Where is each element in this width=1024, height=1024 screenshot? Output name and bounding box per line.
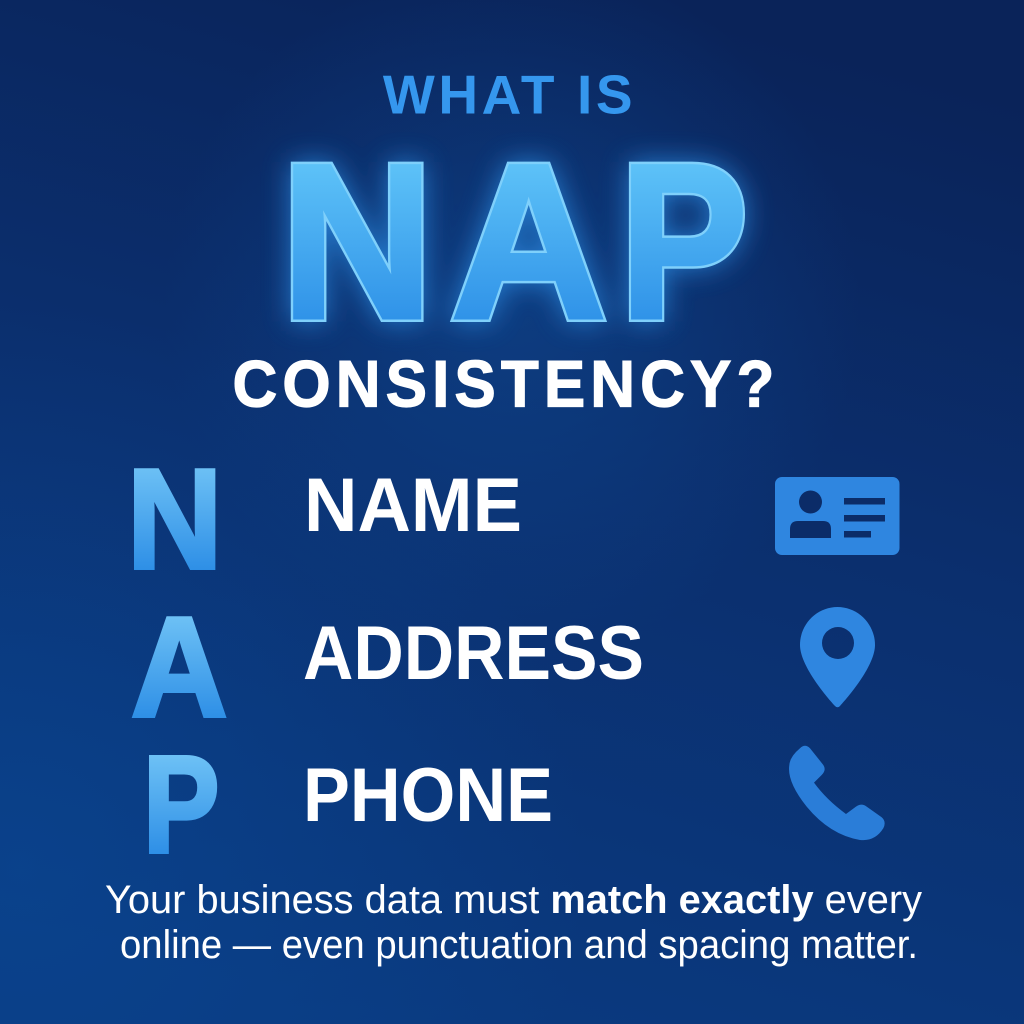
icon: id card xyxy=(775,477,900,555)
heading: what is: WHAT IS xyxy=(383,64,636,126)
heading: NAP glowing title: P xyxy=(620,118,748,364)
label: address: ADDRESS xyxy=(303,611,644,696)
heading: NAP glowing title xyxy=(281,118,748,365)
heading: NAP glowing title: N xyxy=(281,119,434,364)
description text: online — even punctuation and spacing matter. xyxy=(120,923,918,967)
row: name xyxy=(127,441,899,599)
heading: NAP glowing title: A xyxy=(451,120,607,365)
description text: Your business data must match exactly every xyxy=(105,878,922,922)
label: name: NAME xyxy=(304,463,522,548)
letter P: P xyxy=(143,727,219,881)
heading: NAP glowing title: A xyxy=(451,120,607,365)
description text xyxy=(105,878,922,967)
icon: location pin xyxy=(800,607,875,707)
row: address xyxy=(131,588,875,747)
heading: NAP glowing title: N xyxy=(281,119,434,364)
letter A: A xyxy=(131,588,227,747)
heading: NAP glowing title: A xyxy=(451,120,607,365)
heading: NAP glowing title: N xyxy=(281,119,434,364)
label: phone: PHONE xyxy=(303,753,553,838)
row: phone xyxy=(143,727,885,881)
heading: NAP glowing title: P xyxy=(620,118,748,364)
heading: consistency: CONSISTENCY? xyxy=(233,347,779,421)
letter N: N xyxy=(127,441,222,599)
heading: NAP glowing title: P xyxy=(620,118,748,364)
icon: telephone xyxy=(789,746,885,840)
